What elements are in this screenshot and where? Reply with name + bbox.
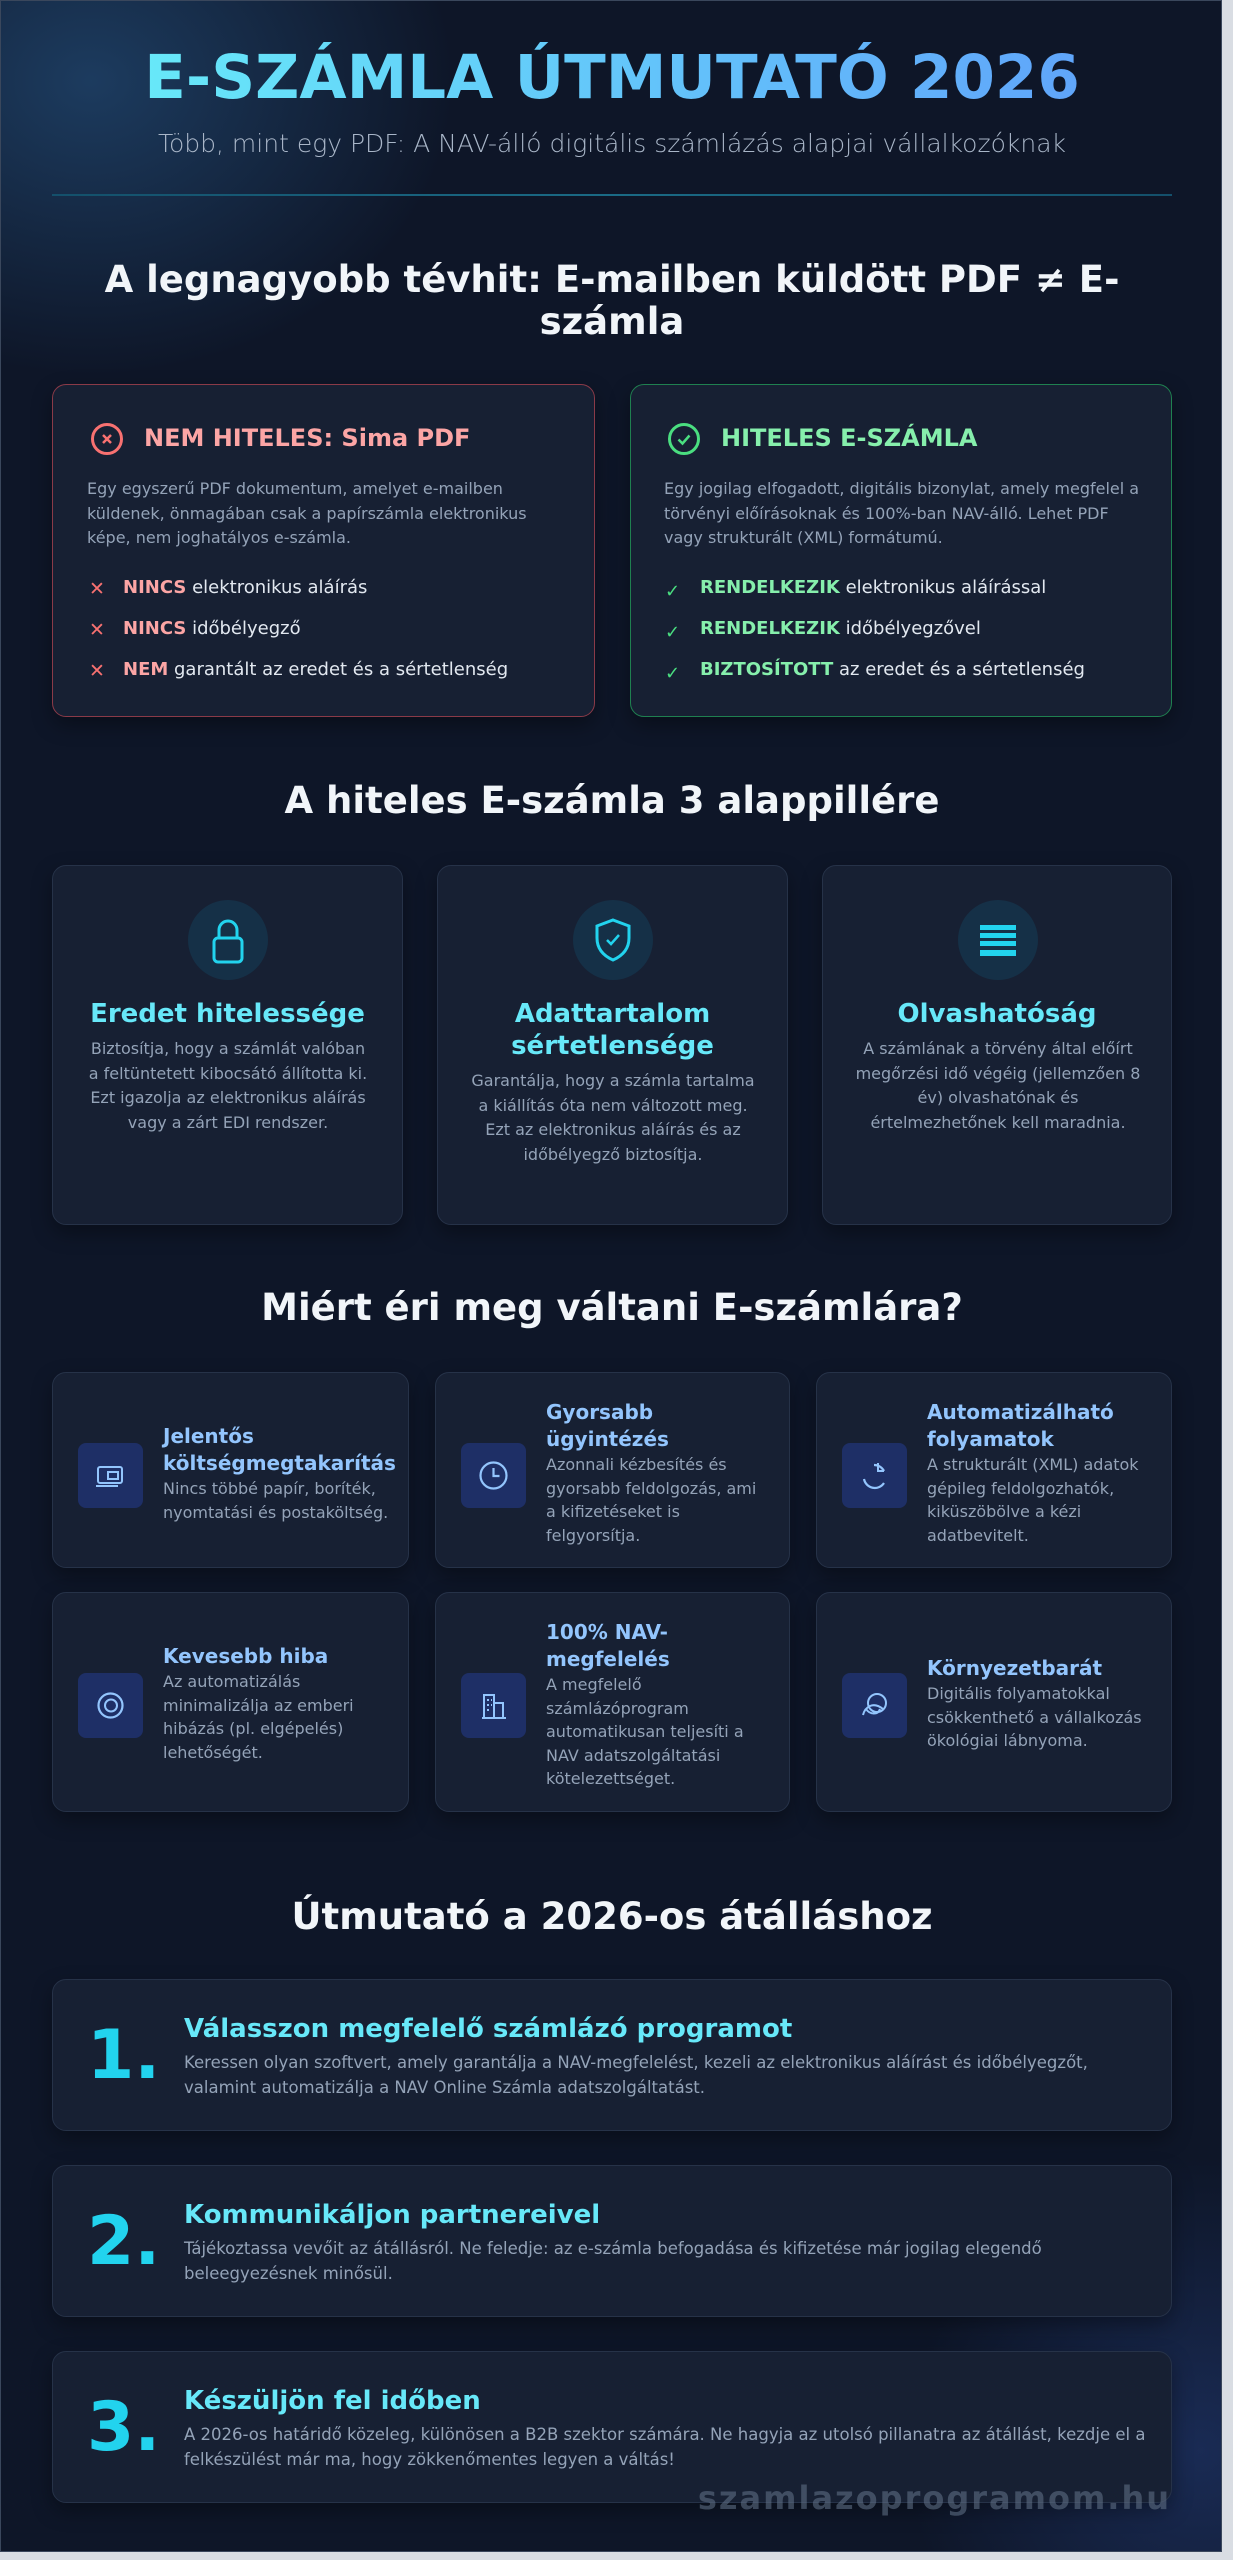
subtitle: Több, mint egy PDF: A NAV-álló digitális számlázás alapjai vállalkozóknak — [158, 129, 1066, 158]
text: folyamatok — [927, 1427, 1054, 1451]
panel: pillar 1 — [52, 865, 403, 1225]
step 3: Készüljön fel időben — [184, 2386, 481, 2416]
text: A strukturált (XML) adatok gépileg feldolgozhatók, kiküszöbölve a kézi adatbevitelt. — [927, 1455, 1139, 1544]
list: RENDELKEZIK időbélyegzővel — [700, 618, 981, 639]
text: 100% NAV- — [546, 1620, 668, 1644]
description: Egy egyszerű PDF dokumentum, amelyet e-mailben küldenek, önmagában csak a papírszámla elektronikus képe, nem joghatályos e-számla. — [87, 479, 527, 547]
text — [546, 1620, 744, 1788]
text: A megfelelő számlázóprogram automatikusan teljesíti a NAV adatszolgáltatási kötelezettséget. — [546, 1675, 744, 1788]
icon: refresh — [842, 1443, 907, 1508]
heading: pillars: A hiteles E-számla 3 alappillére — [285, 779, 939, 822]
text: Gyorsabb — [546, 1400, 653, 1424]
text: Környezetbarát — [927, 1656, 1102, 1680]
text: Jelentős — [163, 1424, 254, 1448]
icon: lock — [188, 900, 268, 980]
text: megfelelés — [546, 1647, 670, 1671]
heading: myth: számla — [540, 300, 684, 343]
list: ✓ — [665, 663, 680, 684]
list: BIZTOSÍTOTT az eredet és a sértetlenség — [700, 659, 1085, 680]
step 3 — [52, 2351, 1172, 2503]
heading: not authentic: NEM HITELES: Sima PDF — [144, 424, 470, 452]
panel: authentic — [630, 384, 1172, 717]
step 1: Keressen olyan szoftvert, amely garantálja a NAV-megfelelést, kezeli az elektronikus aláírást és időbélyegzőt, valamint automatizálja a NAV Online Számla adatszolgáltatást. — [184, 2053, 1088, 2097]
list: ✓ — [665, 622, 680, 643]
pillar title: Olvashatóság — [898, 999, 1096, 1029]
list: ✓ — [665, 581, 680, 602]
step 2 — [52, 2165, 1172, 2317]
text: Kevesebb hiba — [163, 1644, 328, 1668]
text: Nincs többé papír, boríték, nyomtatási és postaköltség. — [163, 1479, 388, 1522]
heading: myth: A legnagyobb tévhit: E-mailben küldött PDF ≠ E- — [105, 258, 1119, 301]
panel: pillar 2 — [437, 865, 788, 1225]
panel: benefit 5 — [435, 1592, 790, 1812]
list: NINCS időbélyegző — [123, 618, 301, 639]
text: Az automatizálás minimalizálja az emberi hibázás (pl. elgépelés) lehetőségét. — [163, 1672, 354, 1762]
panel: benefit 6 — [816, 1592, 1172, 1812]
step 2: 2. — [87, 2202, 160, 2281]
list: RENDELKEZIK elektronikus aláírással — [700, 577, 1046, 598]
icon: leaf globe — [842, 1673, 907, 1738]
text — [546, 1400, 756, 1544]
list: NINCS elektronikus aláírás — [123, 577, 367, 598]
icon: money — [78, 1443, 143, 1508]
icon: shield — [573, 900, 653, 980]
pillar text: Garantálja, hogy a számla tartalma a kiállítás óta nem változott meg. Ezt az elektronikus aláírás és az időbélyegző biztosítja. — [471, 1071, 755, 1164]
watermark: szamlazoprogramom.hu — [698, 2479, 1171, 2517]
text: Azonnali kézbesítés és gyorsabb feldolgozás, ami a kifizetéseket is felgyorsítja. — [546, 1455, 756, 1544]
text — [162, 1424, 396, 1522]
heading: guide: Útmutató a 2026-os átálláshoz — [291, 1895, 933, 1938]
step 1 — [52, 1979, 1172, 2131]
pillar title: Adattartalom — [515, 999, 710, 1029]
heading: authentic: HITELES E-SZÁMLA — [721, 424, 977, 452]
panel: not authentic — [52, 384, 595, 717]
pillar title: sértetlensége — [511, 1031, 714, 1061]
icon: list — [958, 900, 1038, 980]
pillar title: Eredet hitelessége — [90, 999, 365, 1029]
list — [89, 577, 508, 682]
text: Digitális folyamatokkal csökkenthető a vállalkozás ökológiai lábnyoma. — [927, 1684, 1142, 1750]
pillar text: A számlának a törvény által előírt megőrzési idő végéig (jellemzően 8 év) olvashatónak és értelmezhetőnek kell maradnia. — [856, 1039, 1140, 1132]
step 1: 1. — [87, 2016, 160, 2095]
text — [927, 1400, 1139, 1544]
step 3: 3. — [87, 2388, 160, 2467]
heading: benefits: Miért éri meg váltani E-számlára? — [261, 1286, 963, 1329]
step 3: A 2026-os határidő közeleg, különösen a B2B szektor számára. Ne hagyja az utolsó pillanatra az átállást, kezdje el a felkészülést már ma, hogy zökkenőmentes legyen a váltás! — [184, 2425, 1145, 2469]
panel: benefit 1 — [52, 1372, 409, 1568]
step 1: Válasszon megfelelő számlázó programot — [184, 2014, 792, 2044]
description: Egy jogilag elfogadott, digitális bizonylat, amely megfelel a törvényi előírásoknak és 100%-ban NAV-álló. Lehet PDF vagy strukturált (XML) formátumú. — [664, 479, 1139, 547]
panel: benefit 3 — [816, 1372, 1172, 1568]
text: költségmegtakarítás — [163, 1451, 396, 1475]
icon: building — [461, 1673, 526, 1738]
icon: clock — [461, 1443, 526, 1508]
text: ügyintézés — [546, 1427, 669, 1451]
step 2: Kommunikáljon partnereivel — [184, 2200, 600, 2230]
icon: check circle — [668, 423, 700, 455]
panel: benefit 2 — [435, 1372, 790, 1568]
step 2: Tájékoztassa vevőit az átállásról. Ne feledje: az e-számla befogadása és kifizetése már jogilag elegendő beleegyezésnek minősül. — [184, 2239, 1042, 2283]
pillar text: Biztosítja, hogy a számlát valóban a feltüntetett kibocsátó állította ki. Ezt igazolja az elektronikus aláírás vagy a zárt EDI rendszer. — [89, 1039, 367, 1132]
panel: benefit 4 — [52, 1592, 409, 1812]
text: Automatizálható — [927, 1400, 1114, 1424]
list: ✕ — [89, 619, 105, 641]
list — [665, 577, 1085, 684]
pillar title — [511, 999, 714, 1061]
list: NEM garantált az eredet és a sértetlenség — [123, 659, 508, 680]
list: ✕ — [89, 578, 105, 600]
title: E-SZÁMLA ÚTMUTATÓ 2026 — [144, 42, 1080, 113]
panel: pillar 3 — [822, 865, 1172, 1225]
heading: myth — [104, 258, 1119, 343]
icon: x circle — [91, 423, 123, 455]
icon: target — [78, 1673, 143, 1738]
list: ✕ — [89, 660, 105, 682]
